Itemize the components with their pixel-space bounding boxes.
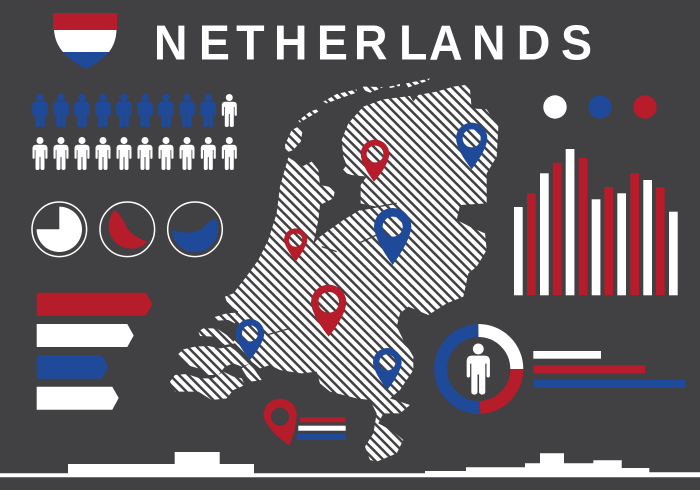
mini flag bars: [297, 417, 346, 440]
map pin: blue south-west: [236, 319, 264, 360]
icon row: white people: [32, 137, 237, 170]
skyline right: [400, 453, 700, 477]
pie chart: white: [32, 202, 87, 257]
icon row: blue people: [32, 94, 237, 127]
icon: flag shield: [53, 13, 117, 69]
map pin: blue centre: [374, 208, 411, 265]
donut chart with person: [441, 330, 517, 408]
map pin: blue south: [373, 348, 402, 390]
dots legend: [543, 95, 657, 119]
map pin: blue north-east: [456, 123, 487, 169]
map pin: red centre: [311, 285, 346, 337]
legend pin with mini flag: [263, 399, 346, 446]
icon: red pin: [263, 399, 297, 446]
arrow: red: [37, 293, 152, 316]
skyline baseline: [0, 452, 700, 477]
arrow: blue: [37, 355, 108, 379]
icon: person: [467, 344, 490, 395]
map pin: red west: [284, 228, 307, 262]
arrow: white: [37, 387, 119, 410]
skyline left: [0, 452, 400, 477]
map pin: red north: [361, 140, 389, 182]
map of the Netherlands: [170, 78, 498, 462]
title: NETHERLANDS: [154, 16, 592, 71]
arrow: white: [37, 324, 134, 347]
bar chart: [514, 149, 678, 295]
map land: [170, 78, 498, 462]
map rivers: [267, 203, 397, 335]
pie chart: blue: [168, 202, 222, 257]
horizontal bars: [533, 351, 685, 388]
pie chart: red: [100, 202, 155, 257]
